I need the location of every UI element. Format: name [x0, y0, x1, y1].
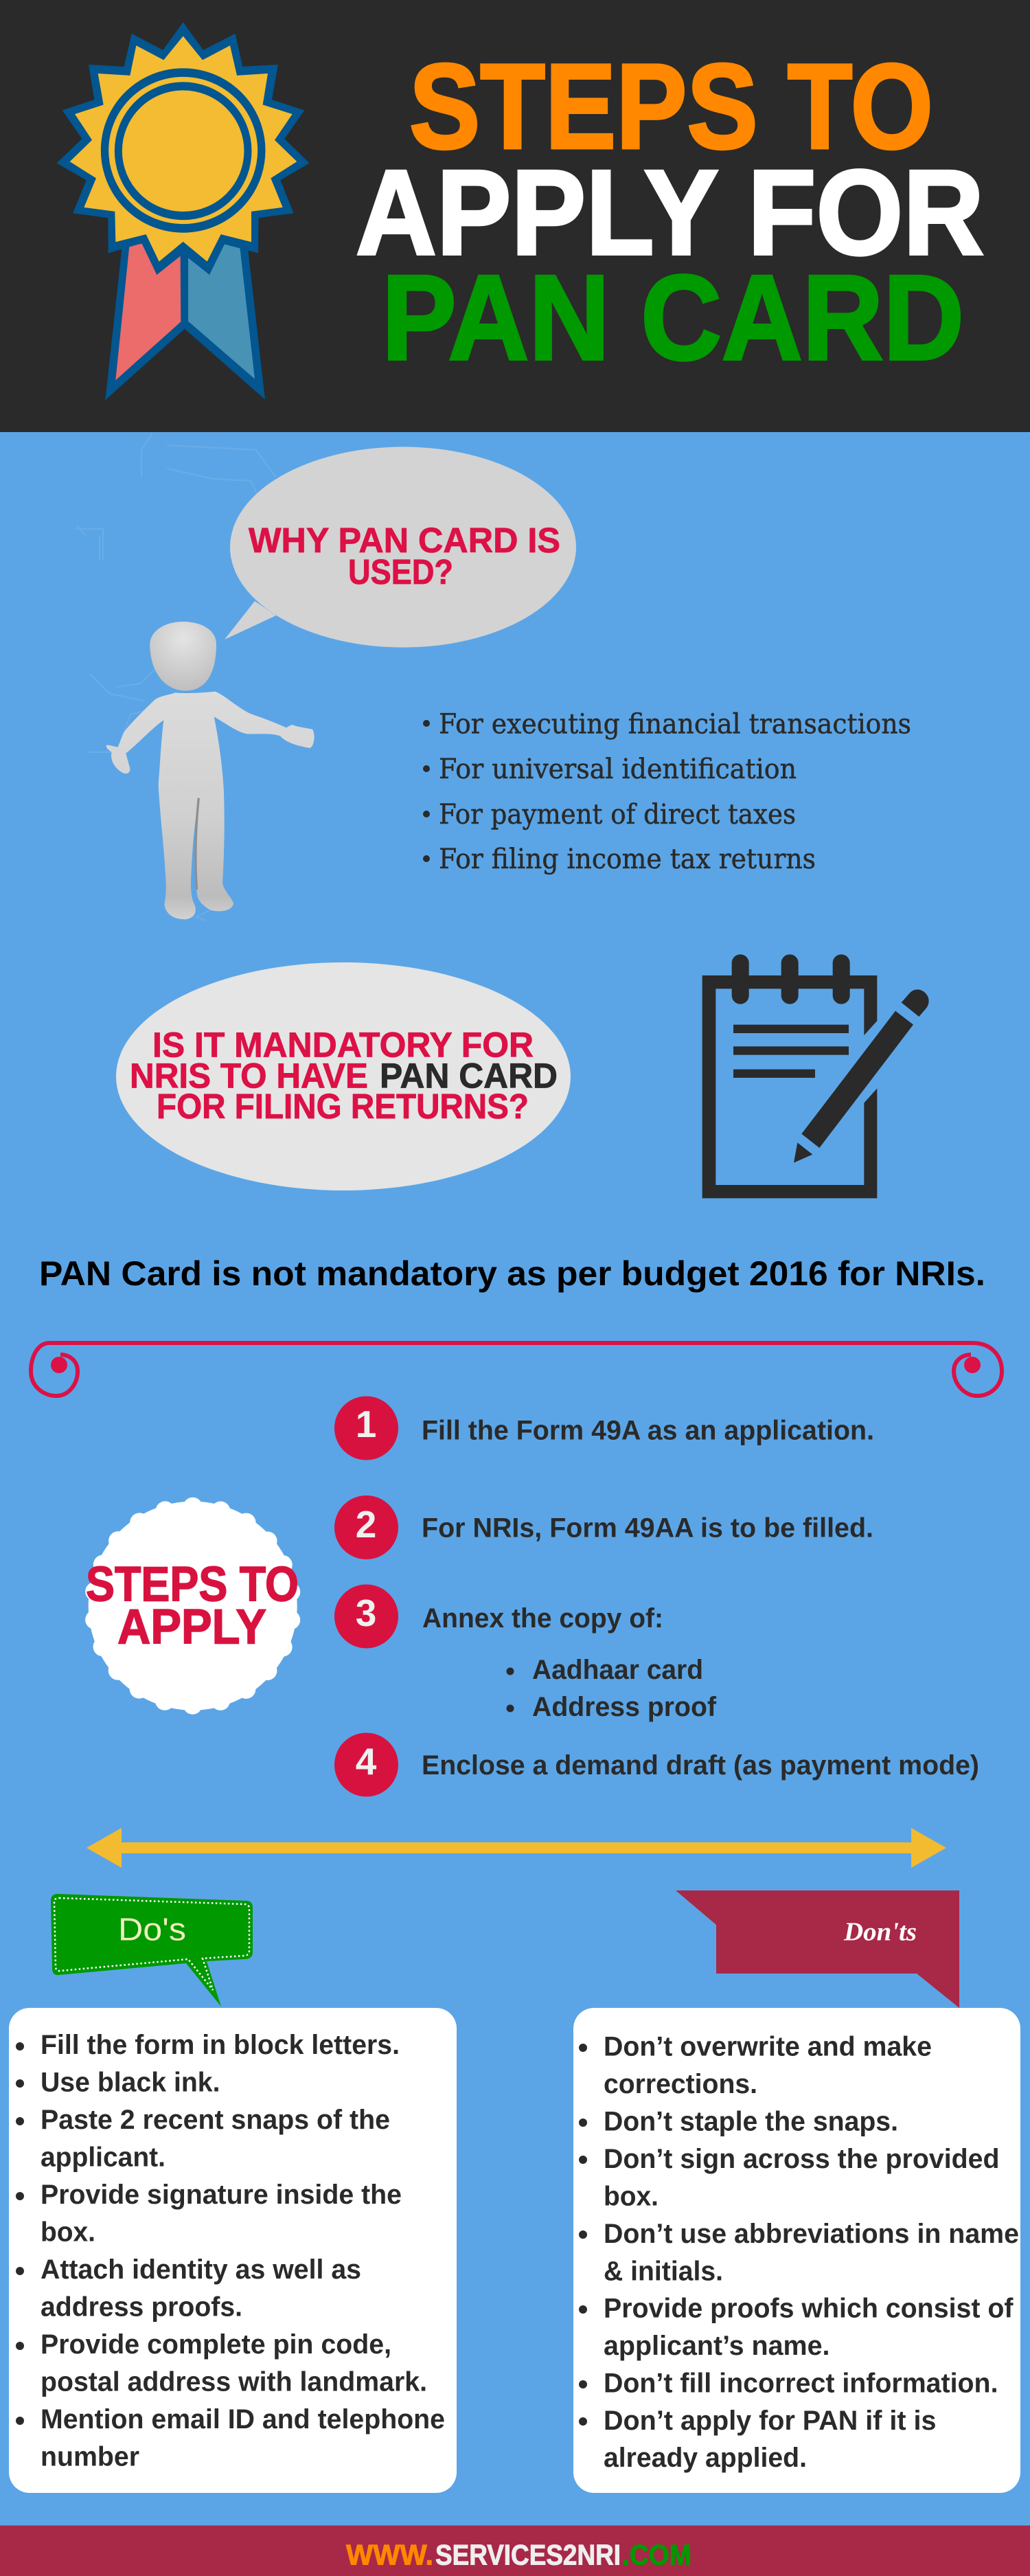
- website url: .COM: [622, 2539, 691, 2571]
- step 2: [334, 1495, 873, 1559]
- card: do's list: postal address with landmark.: [41, 2367, 427, 2397]
- step 3: Aadhaar card: [532, 1655, 703, 1685]
- card: don'ts list: & initials.: [604, 2256, 723, 2286]
- step 2: 2: [356, 1503, 376, 1546]
- speech bubble: why PAN card is used: [225, 447, 576, 647]
- question text: FOR FILING RETURNS?: [157, 1087, 529, 1126]
- tag: Don'ts: [676, 1890, 959, 2008]
- card: do's list: Mention email ID and telephone: [41, 2404, 445, 2434]
- step 4: [334, 1732, 979, 1797]
- step 3: Address proof: [532, 1692, 717, 1722]
- flourish divider: [31, 1343, 1002, 1396]
- card: don'ts list: corrections.: [604, 2069, 757, 2099]
- footer band: [0, 2525, 1030, 2576]
- card: don'ts list: Don’t sign across the provided: [604, 2144, 1000, 2174]
- statement: not mandatory: PAN Card is not mandatory as per budget 2016 for NRIs.: [39, 1254, 985, 1293]
- card: do's list: Fill the form in block letters.: [41, 2030, 400, 2060]
- card: do's list: Attach identity as well as: [41, 2255, 361, 2285]
- website url: [346, 2539, 691, 2571]
- title: [356, 40, 984, 385]
- arrow: double headed: [87, 1828, 946, 1868]
- list: uses of PAN card: For universal identification: [439, 754, 797, 785]
- bubble heading: USED?: [348, 552, 453, 591]
- step 3: Annex the copy of:: [422, 1603, 663, 1634]
- tag: Do's: [51, 1894, 253, 2007]
- card: don'ts list: Don’t apply for PAN if it is: [604, 2406, 937, 2436]
- step 4: 4: [356, 1740, 377, 1783]
- step 2: For NRIs, Form 49AA is to be filled.: [422, 1513, 873, 1543]
- card: don'ts list: box.: [604, 2182, 659, 2212]
- question text: PAN CARD: [380, 1057, 558, 1095]
- card: don'ts list: Don’t fill incorrect information.: [604, 2369, 998, 2399]
- question text: [130, 1025, 558, 1126]
- step 4: Enclose a demand draft (as payment mode): [422, 1750, 979, 1781]
- card: do's list: box.: [41, 2217, 95, 2248]
- title: PAN CARD: [382, 251, 964, 385]
- tag: Do's: Do's: [118, 1911, 186, 1947]
- oval: mandatory question: [116, 962, 571, 1190]
- list: uses of PAN card: For filing income tax returns: [439, 844, 816, 875]
- card: do's list: Provide signature inside the: [41, 2180, 402, 2210]
- card: don'ts list: [573, 2008, 1020, 2493]
- card: do's list: Use black ink.: [41, 2068, 220, 2098]
- step 1: Fill the Form 49A as an application.: [422, 1415, 874, 1445]
- icon: award ribbon: [57, 22, 310, 400]
- tag: Don'ts: Don'ts: [843, 1918, 917, 1947]
- card: do's list: applicant.: [41, 2142, 165, 2172]
- card: do's list: [9, 2008, 457, 2493]
- header band: [0, 0, 1030, 432]
- icon: notepad and pencil: [702, 954, 929, 1198]
- website url: SERVICES2NRI: [435, 2539, 621, 2571]
- step 1: 1: [356, 1403, 376, 1445]
- card: do's list: address proofs.: [41, 2292, 242, 2322]
- card: do's list: Paste 2 recent snaps of the: [41, 2105, 390, 2135]
- card: don'ts list: Provide proofs which consist of: [604, 2293, 1014, 2323]
- card: don'ts list: Don’t staple the snaps.: [604, 2106, 898, 2136]
- list: uses of PAN card: For payment of direct taxes: [439, 799, 796, 831]
- icon: 3D figure: [106, 622, 314, 919]
- badge: steps to apply: APPLY: [117, 1601, 266, 1654]
- list: uses of PAN card: For executing financial transactions: [439, 709, 911, 741]
- card: don'ts list: already applied.: [604, 2443, 807, 2473]
- faint circuit background lines: [76, 433, 276, 920]
- website url: WWW.: [346, 2539, 433, 2571]
- list: uses of PAN card: [423, 709, 911, 875]
- card: do's list: Provide complete pin code,: [41, 2329, 391, 2360]
- card: don'ts list: Don’t overwrite and make: [604, 2032, 932, 2062]
- title: STEPS TO: [409, 40, 933, 174]
- bubble heading: WHY PAN CARD IS: [249, 521, 560, 560]
- step 3: [334, 1584, 717, 1722]
- bubble heading: [249, 521, 560, 591]
- card: don'ts list: Don’t use abbreviations in name: [604, 2219, 1019, 2249]
- card: do's list: number: [41, 2441, 139, 2472]
- step 1: [334, 1396, 874, 1460]
- question text: NRIS TO HAVE: [130, 1057, 368, 1095]
- badge: steps to apply: [86, 1502, 299, 1710]
- step 3: 3: [356, 1592, 376, 1634]
- badge: steps to apply: STEPS TO: [86, 1558, 299, 1612]
- title: APPLY FOR: [356, 146, 984, 280]
- card: don'ts list: applicant’s name.: [604, 2331, 829, 2361]
- question text: IS IT MANDATORY FOR: [152, 1025, 534, 1065]
